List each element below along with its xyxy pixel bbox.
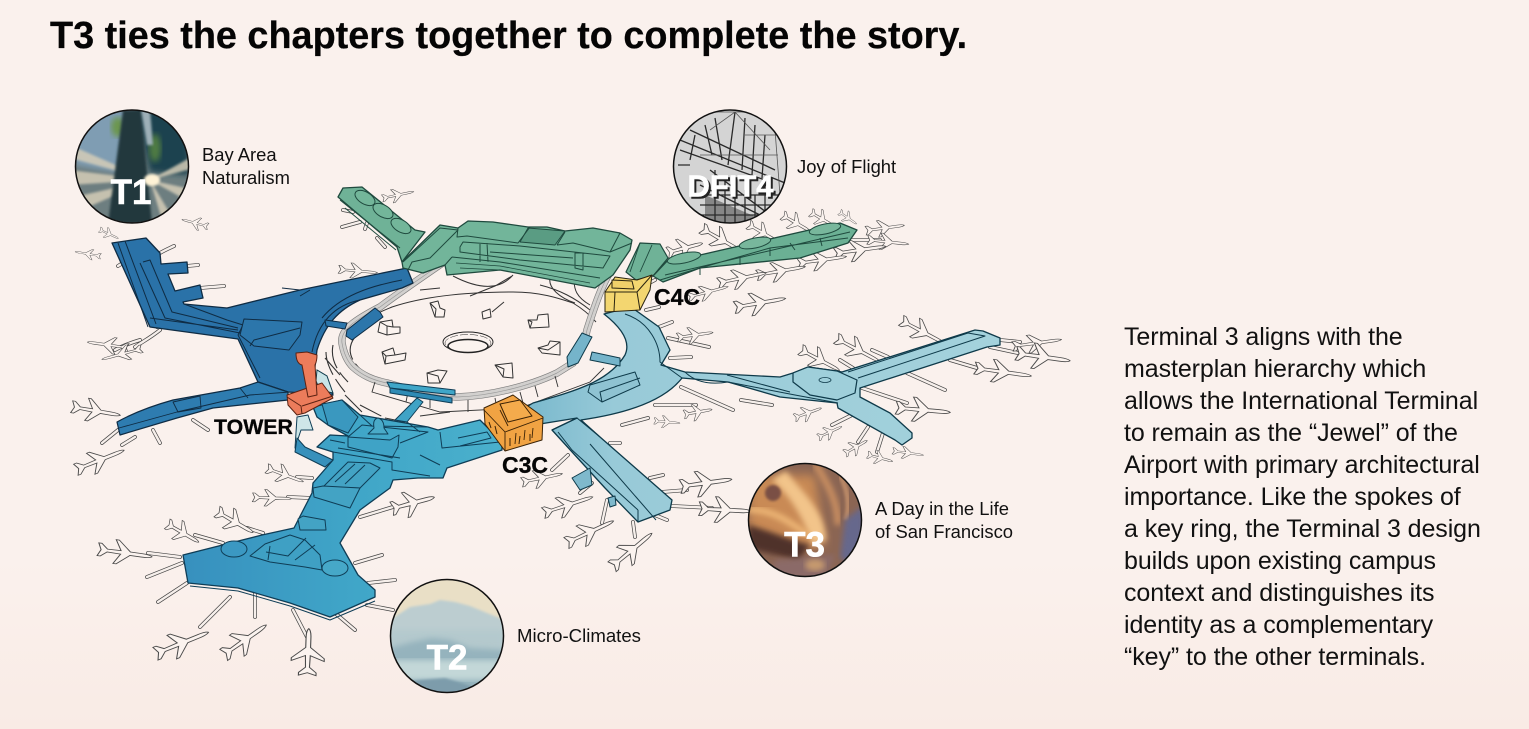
map labels: C4C: [654, 284, 700, 310]
title: T3 ties the chapters together to complete the story.: [50, 15, 967, 57]
T3 caption: [875, 498, 1013, 542]
DFIT4 international terminal building: [338, 187, 857, 288]
DFIT4 caption: Joy of Flight: [797, 156, 896, 177]
terminal 2 building: [183, 382, 502, 620]
tower base highlight: [316, 370, 333, 393]
airport map diagram: [70, 109, 1071, 694]
T3 circle: sunset clouds photo: [748, 463, 864, 580]
terminal 1 building: [112, 238, 413, 435]
T3 caption: A Day in the Life: [875, 498, 1009, 519]
description text block: allows the International Terminal: [1124, 387, 1478, 415]
T3 caption: of San Francisco: [875, 521, 1013, 542]
description text block: importance. Like the spokes of: [1124, 483, 1461, 511]
T2 circle: misty mountains photo: T2: [427, 638, 467, 678]
description text block: context and distinguishes its: [1124, 579, 1434, 607]
T1 caption: Naturalism: [202, 167, 290, 188]
tower stub roof: [322, 400, 358, 433]
map labels: C3C: [502, 452, 548, 478]
ring road and inner roadway lines: [325, 253, 610, 430]
tower building: [287, 352, 333, 415]
T1 circle: redwood photo: T1: [111, 173, 151, 212]
T2 circle: misty mountains photo: [390, 579, 504, 693]
terminal 3 building: [505, 307, 1000, 522]
description text block: masterplan hierarchy which: [1124, 355, 1426, 383]
DFIT4 circle: truss sketch: DFIT4: [688, 168, 774, 204]
map labels: [214, 284, 700, 478]
T1 caption: [202, 144, 290, 188]
map labels: TOWER: [214, 415, 293, 439]
T2 caption: Micro-Climates: [517, 625, 641, 646]
DFIT4 circle: truss sketch: DFIT4: [690, 170, 776, 206]
description text block: “key” to the other terminals.: [1124, 643, 1426, 671]
central garage buildings: [378, 301, 560, 383]
description text block: [1124, 323, 1481, 671]
airplanes around the terminals: [70, 185, 1072, 676]
central rotunda: [443, 332, 493, 352]
description text block: builds upon existing campus: [1124, 547, 1436, 575]
T1 circle: redwood photo: [74, 109, 190, 224]
description text block: identity as a complementary: [1124, 611, 1433, 639]
description text block: Terminal 3 aligns with the: [1124, 323, 1403, 351]
description text block: a key ring, the Terminal 3 design: [1124, 515, 1481, 543]
DFIT4 circle: truss sketch: [673, 110, 790, 225]
jet bridges: [102, 210, 1020, 637]
description text block: Airport with primary architectural: [1124, 451, 1480, 479]
description text block: to remain as the “Jewel” of the: [1124, 419, 1458, 447]
C3C connector building: [484, 395, 543, 451]
C4C connector building: [605, 275, 652, 312]
T3 circle: sunset clouds photo: T3: [784, 526, 825, 564]
T1 caption: Bay Area: [202, 144, 277, 165]
